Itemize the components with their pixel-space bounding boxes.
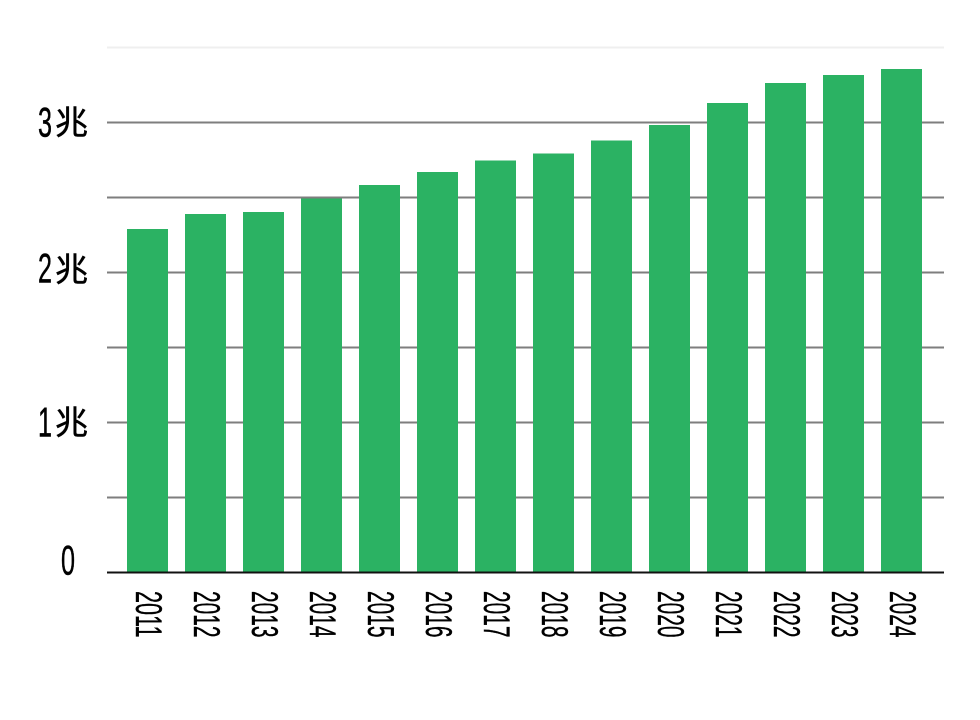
x axis year labels: 2016 [418, 591, 459, 637]
x axis year labels: 2017 [476, 591, 517, 637]
x axis year labels: 2015 [360, 591, 401, 637]
x axis year labels: 2013 [244, 591, 285, 637]
y axis labels [38, 96, 88, 584]
x axis year labels: 2020 [650, 591, 691, 637]
x axis year labels: 2018 [534, 591, 575, 637]
x axis year labels: 2012 [186, 591, 227, 637]
x axis year labels: 2014 [302, 591, 343, 637]
bars [127, 69, 922, 572]
y axis labels: 2 [38, 244, 52, 292]
x axis year labels [128, 591, 923, 638]
y axis labels: 3 [38, 98, 52, 146]
y axis labels: 0 [61, 536, 75, 584]
y axis labels: 兆 [55, 396, 88, 444]
y axis labels: 1 [38, 398, 52, 446]
y axis labels: 兆 [55, 243, 88, 291]
y axis labels: 兆 [55, 96, 88, 144]
x axis line [107, 572, 944, 574]
x axis year labels: 2022 [766, 591, 807, 637]
x axis year labels: 2021 [708, 591, 749, 637]
x axis year labels: 2011 [128, 591, 169, 638]
x axis year labels: 2019 [592, 591, 633, 637]
x axis year labels: 2024 [882, 591, 923, 637]
x axis year labels: 2023 [824, 591, 865, 637]
